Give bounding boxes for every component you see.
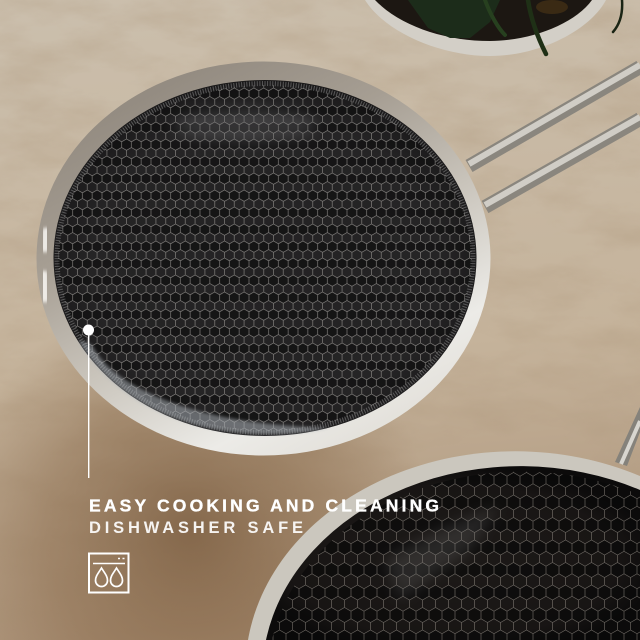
- pan two honeycomb pattern: [272, 472, 640, 640]
- icon: dishwasher: [89, 554, 128, 592]
- pan one rim highlight glints: [44, 232, 46, 298]
- pan one cooking surface: [54, 80, 476, 436]
- pan one edge mesh ring: [57, 84, 473, 432]
- pan one steel rim: [36, 62, 490, 456]
- pan one handle: [469, 65, 640, 207]
- subheading: dishwasher safe: DISHWASHER SAFE: [89, 519, 303, 537]
- pan two reflection: [385, 505, 500, 600]
- pan one lower left reflection: [78, 340, 330, 434]
- heading: easy cooking and cleaning: EASY COOKING AND CLEANING: [89, 496, 439, 516]
- bowl of green vegetables: [365, 0, 622, 56]
- frying pan two: [248, 451, 640, 640]
- pan one honeycomb pattern: [58, 85, 472, 431]
- pan one top reflection: [173, 108, 317, 142]
- frying pan one: [36, 62, 490, 456]
- callout pointer: [83, 324, 94, 478]
- pan two handle: [615, 407, 640, 466]
- pan two cooking surface: [266, 466, 640, 640]
- pan two steel rim: [248, 451, 640, 640]
